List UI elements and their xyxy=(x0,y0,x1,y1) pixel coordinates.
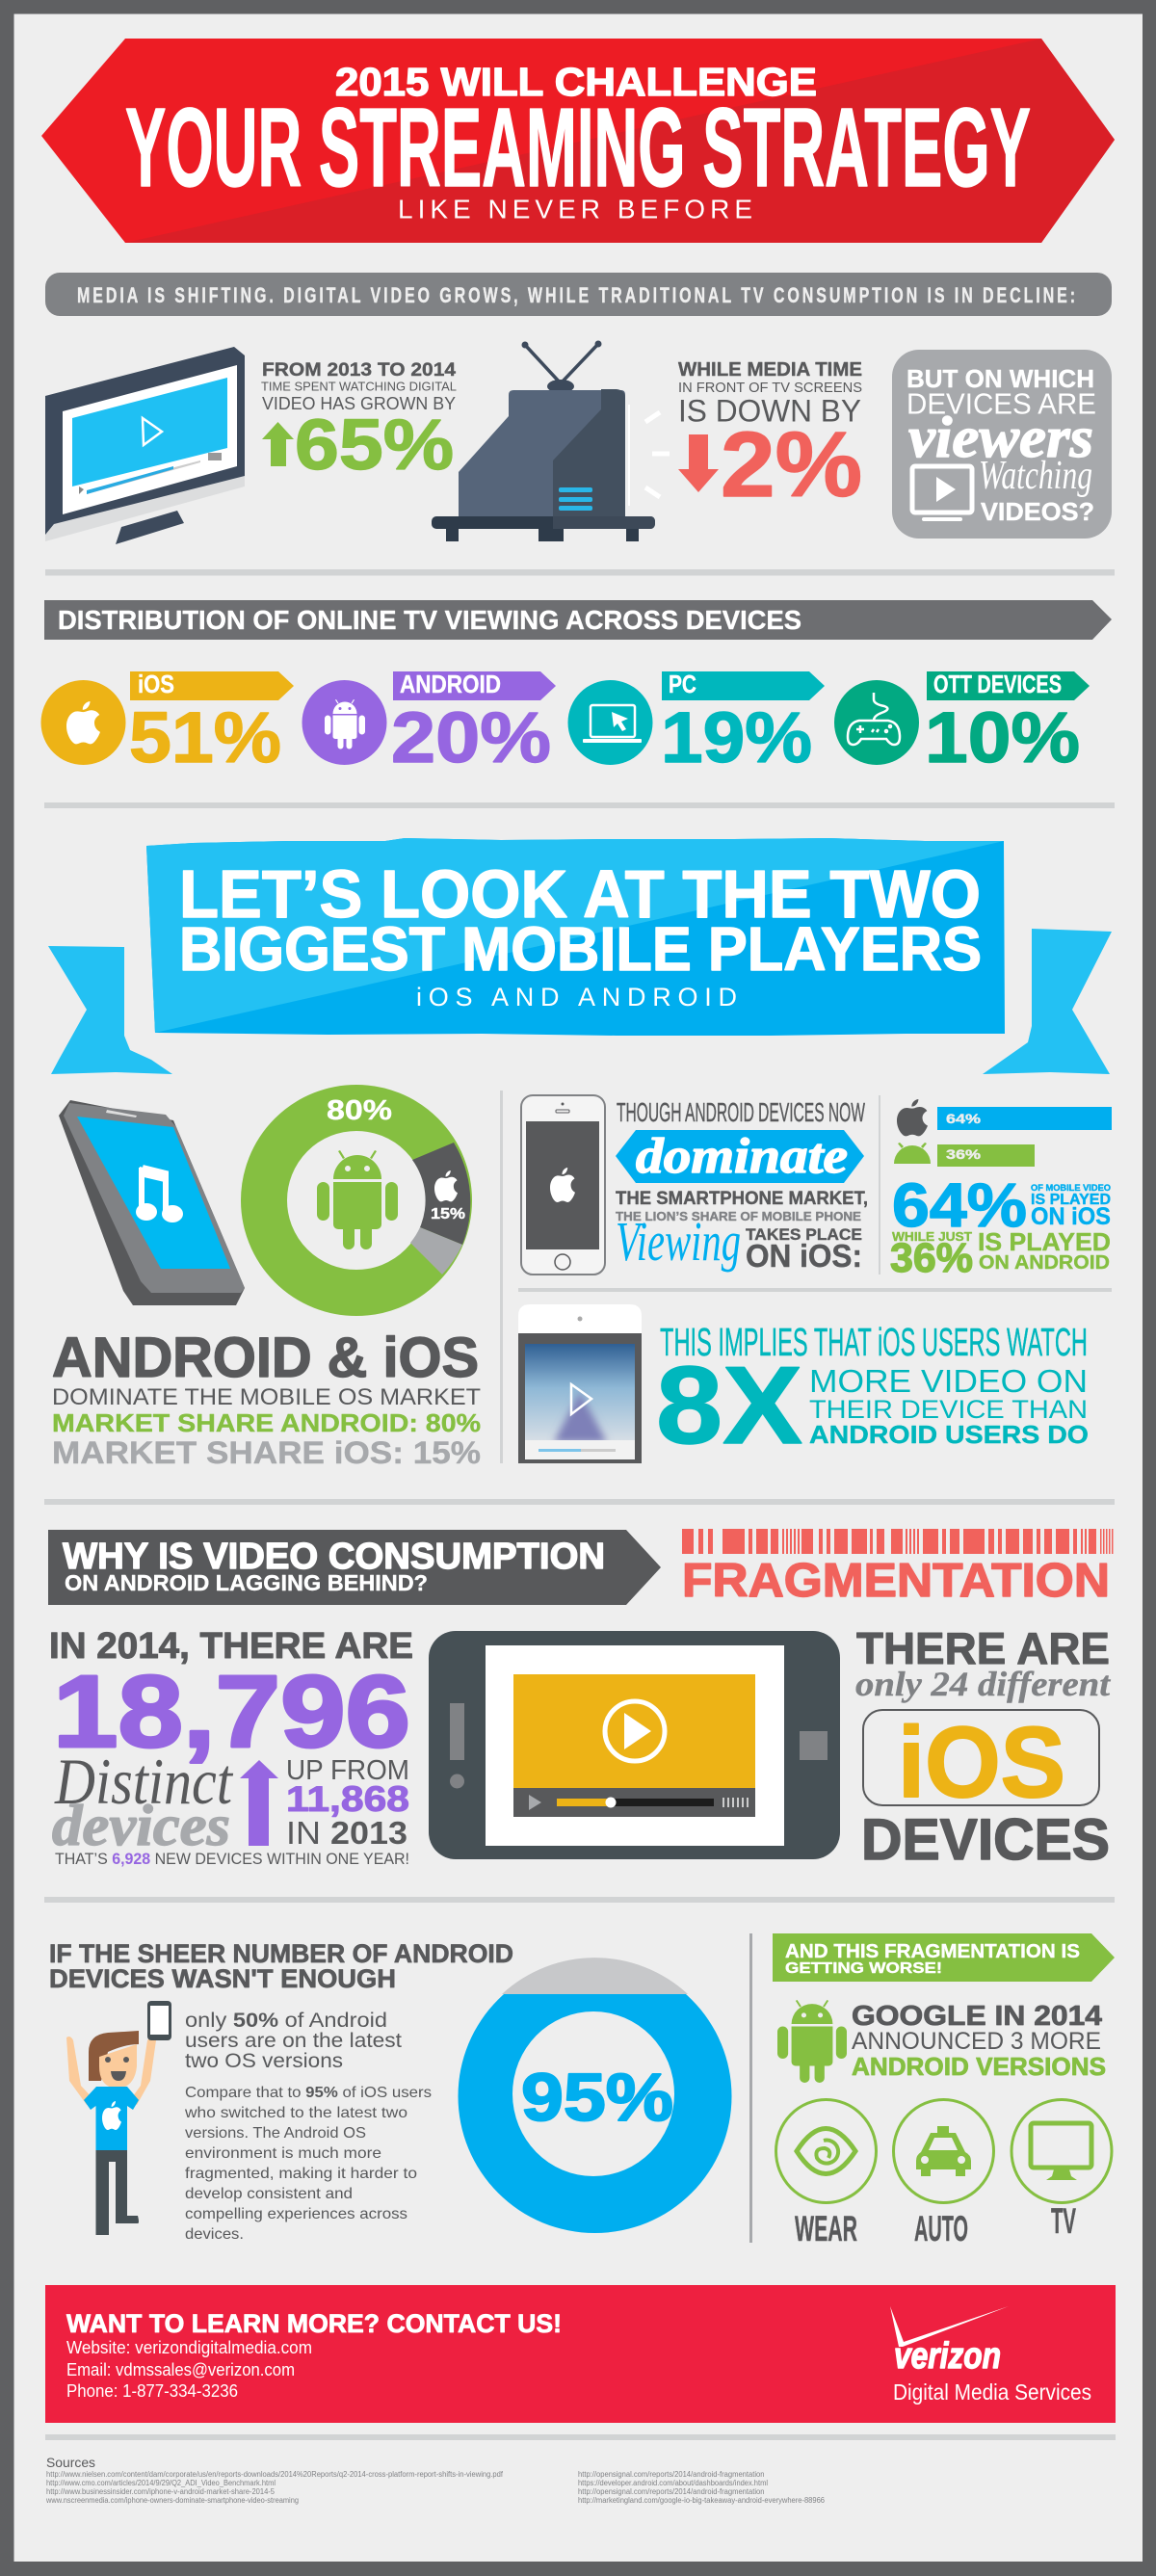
icon: iphone outline xyxy=(521,1095,605,1275)
text block: sources left: http://www.businessinsider.com/iphone-v-android-market-share-2014-5 xyxy=(46,2487,276,2496)
icon: android robot xyxy=(777,2000,847,2083)
icon: green up arrow xyxy=(262,422,294,466)
text block: sources right xyxy=(578,2470,826,2505)
stat: mobile video play share: 64% xyxy=(892,1170,1027,1240)
panel: which devices question: VIDEOS? xyxy=(981,497,1094,526)
android share label: 80% xyxy=(327,1095,392,1126)
text block: android os version stats: Compare that to 95% of iOS users xyxy=(185,2085,432,2101)
stat: mobile video play share: IS PLAYED xyxy=(1031,1192,1111,1208)
icon: android robot xyxy=(317,1150,398,1249)
ios share label: 15% xyxy=(431,1206,465,1222)
text block: ios users watch 8x more: THEIR DEVICE THAN xyxy=(809,1395,1088,1424)
stat: PC 19 percent xyxy=(568,670,825,777)
stat: digital video growth xyxy=(261,360,457,485)
panel: which devices question xyxy=(892,350,1112,539)
text block: sources right: http://marketingland.com/google-io-big-takeaway-android-everywhere-88966 xyxy=(578,2496,826,2505)
icon: tablet with video player xyxy=(429,1631,840,1859)
stat: PC 19 percent: PC xyxy=(669,670,696,698)
stat: mobile video play share xyxy=(890,1170,1111,1281)
stat: iOS 51 percent: iOS xyxy=(138,670,174,698)
icon: apple xyxy=(897,1099,928,1136)
text block: sources right: http://opensignal.com/reports/2014/android-fragmentation xyxy=(578,2487,765,2496)
stat: only 24 ios devices: only 24 different xyxy=(855,1665,1111,1703)
text block: ios users watch 8x more: ANDROID USERS DO xyxy=(809,1420,1089,1449)
icon: android tv xyxy=(1012,2100,1112,2241)
android bar xyxy=(937,1144,1035,1167)
stat: Android 20 percent xyxy=(302,670,556,777)
text block: android and ios dominate: DOMINATE THE MOBILE OS MARKET xyxy=(52,1384,481,1410)
contact heading: WANT TO LEARN MORE? CONTACT US! xyxy=(66,2309,562,2338)
stat: tv time decline xyxy=(678,359,862,516)
android bar: 36% xyxy=(946,1147,981,1162)
logo: verizon digital media services xyxy=(890,2306,1091,2405)
panel: which devices question: Watching xyxy=(979,454,1092,498)
text block: android os version stats: develop consistent and xyxy=(185,2186,353,2202)
icon: apple xyxy=(66,701,100,744)
stat: mobile video play share: WHILE JUST xyxy=(892,1229,972,1244)
text block: android dominates, viewing on ios: Viewing xyxy=(616,1210,741,1273)
stat: Android 20 percent: ANDROID xyxy=(400,670,501,698)
text block: android os version stats: environment is much more xyxy=(185,2145,381,2162)
text block: sources left: http://www.nielsen.com/content/dam/corporate/us/en/reports-downloads/2014%20Reports/q2-2014-cross-platform-report-shifts-in-viewing.pdf xyxy=(46,2470,504,2479)
text block: android os version stats: fragmented, making it harder to xyxy=(185,2166,417,2182)
stat: android device count: 11,868 xyxy=(286,1779,409,1819)
stat: OTT devices 10 percent: OTT DEVICES xyxy=(933,670,1062,698)
callout: fragmentation getting worse: AND THIS FRAGMENTATION IS xyxy=(785,1941,1080,1962)
text block: android os version stats: who switched to the latest two xyxy=(184,2105,407,2121)
text block: android and ios dominate: MARKET SHARE iOS: 15% xyxy=(52,1435,481,1470)
ios badge: iOS xyxy=(898,1707,1065,1819)
ios bar: 64% xyxy=(946,1112,981,1126)
text block: android dominates, viewing on ios: THE SMARTPHONE MARKET, xyxy=(616,1189,868,1209)
stat: android device count: UP FROM xyxy=(286,1755,409,1786)
stat: digital video growth: TIME SPENT WATCHING DIGITAL xyxy=(261,380,457,394)
icon: red down arrow xyxy=(678,434,719,492)
stat: tv time decline: IS DOWN BY xyxy=(678,393,861,428)
text block: android os version stats: versions. The Android OS xyxy=(185,2125,366,2142)
heading: android version adoption: IF THE SHEER NUMBER OF ANDROID xyxy=(49,1939,513,1968)
stat: only 24 ios devices xyxy=(855,1623,1111,1872)
icon: man holding phone xyxy=(66,2001,171,2235)
contact details xyxy=(66,2338,312,2401)
logo: verizon digital media services: Digital Media Services xyxy=(893,2379,1091,2405)
stat: mobile video play share: 36% xyxy=(890,1235,973,1281)
heading: android version adoption xyxy=(49,1939,513,1993)
text block: sources right: https://developer.android.com/about/dashboards/index.html xyxy=(578,2479,768,2487)
contact details: Phone: 1-877-334-3236 xyxy=(66,2381,238,2401)
text block: android dominates, viewing on ios: THOUGH ANDROID DEVICES NOW xyxy=(617,1097,865,1127)
icon: android tv: TV xyxy=(1051,2201,1076,2241)
title banner xyxy=(41,39,1115,243)
icon: apple xyxy=(434,1170,458,1201)
ios bar xyxy=(937,1107,1112,1130)
icon: desktop monitor xyxy=(45,347,245,544)
heading: fragmentation with barcode: FRAGMENTATION xyxy=(682,1555,1110,1607)
icon: android auto: AUTO xyxy=(914,2209,968,2248)
chart: video play share bars xyxy=(894,1099,1112,1167)
stat: android device count: devices xyxy=(52,1794,230,1857)
chart: mobile OS market share donut xyxy=(264,1095,470,1293)
stat: tv time decline: IN FRONT OF TV SCREENS xyxy=(678,380,862,396)
callout: fragmentation getting worse: GETTING WORSE! xyxy=(785,1960,942,1977)
icon: smartphone with music note xyxy=(59,1100,245,1305)
12 percent figure: 2% xyxy=(721,413,862,516)
text block: android dominates, viewing on ios: THE LION’S SHARE OF MOBILE PHONE xyxy=(616,1209,861,1223)
heading: device distribution: DISTRIBUTION OF ONLINE TV VIEWING ACROSS DEVICES xyxy=(58,605,801,635)
text block: sources right: http://opensignal.com/reports/2014/android-fragmentation xyxy=(578,2470,765,2479)
stat: iOS 51 percent xyxy=(40,670,294,777)
text block: android dominates, viewing on ios xyxy=(616,1097,868,1274)
stat: android device count: IN 2013 xyxy=(286,1815,407,1851)
stat: digital video growth: VIDEO HAS GROWN BY xyxy=(262,393,456,413)
8x figure: 8X xyxy=(656,1345,802,1467)
panel: which devices question: DEVICES ARE xyxy=(906,387,1096,420)
stat: Android 20 percent: 20% xyxy=(391,697,551,777)
text block: android os version stats xyxy=(184,2009,432,2243)
stat: digital video growth: FROM 2013 TO 2014 xyxy=(262,360,456,381)
text block: android and ios dominate xyxy=(52,1327,481,1470)
text block: android os version stats: devices. xyxy=(185,2226,244,2243)
stat: only 24 ios devices: THERE ARE xyxy=(856,1623,1110,1673)
stat: OTT devices 10 percent: 10% xyxy=(925,697,1080,777)
text block: android and ios dominate: ANDROID & iOS xyxy=(52,1327,479,1389)
text block: android dominates, viewing on ios: ON iOS: xyxy=(746,1238,862,1274)
icon: android wear: WEAR xyxy=(795,2209,857,2248)
ribbon banner: two biggest mobile players xyxy=(48,838,1112,1074)
stat: PC 19 percent: 19% xyxy=(661,697,812,777)
contact details: Website: verizondigitalmedia.com xyxy=(66,2338,312,2357)
icon: android wear xyxy=(776,2100,877,2248)
title line 3: LIKE NEVER BEFORE xyxy=(398,195,752,223)
stat: only 24 ios devices: DEVICES xyxy=(861,1807,1110,1872)
panel: which devices question: BUT ON WHICH xyxy=(906,364,1094,393)
icon: old television xyxy=(432,341,670,541)
stat: OTT devices 10 percent xyxy=(834,670,1090,777)
text block: three more android versions: ANNOUNCED 3 MORE xyxy=(852,2028,1101,2055)
icon: android head xyxy=(894,1143,931,1164)
text block: android and ios dominate: MARKET SHARE ANDROID: 80% xyxy=(52,1408,481,1437)
stat: mobile video play share: IS PLAYED xyxy=(978,1227,1111,1256)
stat: mobile video play share: ON iOS xyxy=(1031,1203,1111,1230)
banner headline: BIGGEST MOBILE PLAYERS xyxy=(179,914,982,984)
text block: android os version stats: only 50% of Android xyxy=(185,2009,387,2032)
chart: 95 percent ios donut xyxy=(459,1958,732,2233)
banner headline: LET’S LOOK AT THE TWO xyxy=(179,856,981,932)
icon: laptop and cursor xyxy=(583,705,642,743)
icon: purple up arrow xyxy=(240,1760,278,1846)
chart: 95 percent ios donut: 95% xyxy=(521,2060,673,2135)
intro strip xyxy=(45,273,1112,316)
heading: fragmentation with barcode xyxy=(682,1529,1114,1607)
18,796 figure: 18,796 xyxy=(53,1655,410,1769)
icon: game controller xyxy=(848,693,900,745)
stat: android device count: Distinct xyxy=(54,1745,234,1818)
stat: android device count: IN 2014, THERE ARE xyxy=(49,1626,413,1667)
text block: sources left: Sources xyxy=(46,2455,95,2470)
text block: ios users watch 8x more: MORE VIDEO ON xyxy=(809,1363,1088,1399)
icon: video monitor xyxy=(912,466,972,521)
heading: why android lags xyxy=(48,1530,661,1605)
icon: phone playing video xyxy=(518,1304,642,1463)
heading: why android lags: ON ANDROID LAGGING BEHIND? xyxy=(65,1570,428,1595)
icon: android auto xyxy=(894,2100,994,2248)
text block: ios users watch 8x more xyxy=(656,1320,1089,1467)
icon: android robot xyxy=(325,699,365,749)
text block: sources left xyxy=(45,2455,504,2505)
banner headline xyxy=(179,856,982,984)
text block: android os version stats: users are on the latest xyxy=(185,2029,402,2052)
stat: tv time decline: WHILE MEDIA TIME xyxy=(678,359,862,381)
stat: mobile video play share: OF MOBILE VIDEO xyxy=(1031,1183,1111,1193)
text block: android os version stats: two OS versions xyxy=(185,2049,343,2072)
text block: android os version stats: compelling experiences across xyxy=(185,2206,407,2222)
callout: fragmentation getting worse xyxy=(773,1933,1115,1982)
text block: three more android versions: ANDROID VERSIONS xyxy=(852,2052,1106,2081)
banner subhead: iOS AND ANDROID xyxy=(416,983,737,1012)
stat: mobile video play share: ON ANDROID xyxy=(979,1252,1110,1274)
heading: android version adoption: DEVICES WASN'T ENOUGH xyxy=(49,1964,396,1993)
65 percent figure: 65% xyxy=(295,405,454,485)
panel: contact footer xyxy=(45,2285,1116,2423)
text block: android dominates, viewing on ios: TAKES PLACE xyxy=(746,1225,862,1244)
stat: iOS 51 percent: 51% xyxy=(129,697,281,777)
title line 1: 2015 WILL CHALLENGE xyxy=(335,60,817,104)
dominate badge: dominate xyxy=(636,1129,848,1184)
text block: three more android versions xyxy=(852,2001,1106,2081)
text block: sources left: www.nscreenmedia.com/iphone-owners-dominate-smartphone-video-streaming xyxy=(45,2496,299,2505)
text block: three more android versions: GOOGLE IN 2014 xyxy=(852,2001,1102,2032)
text block: sources left: http://www.cmo.com/articles/2014/9/29/Q2_ADI_Video_Benchmark.html xyxy=(46,2479,276,2487)
heading: device distribution xyxy=(44,600,1112,640)
panel: which devices question: viewers xyxy=(908,406,1093,469)
stat: android device count xyxy=(49,1626,413,1868)
heading: why android lags: WHY IS VIDEO CONSUMPTION xyxy=(63,1537,605,1577)
contact details: Email: vdmssales@verizon.com xyxy=(66,2360,295,2379)
stat: android device count: THAT’S 6,928 NEW DEVICES WITHIN ONE YEAR! xyxy=(55,1850,409,1868)
logo: verizon digital media services: verizon xyxy=(894,2336,1001,2377)
